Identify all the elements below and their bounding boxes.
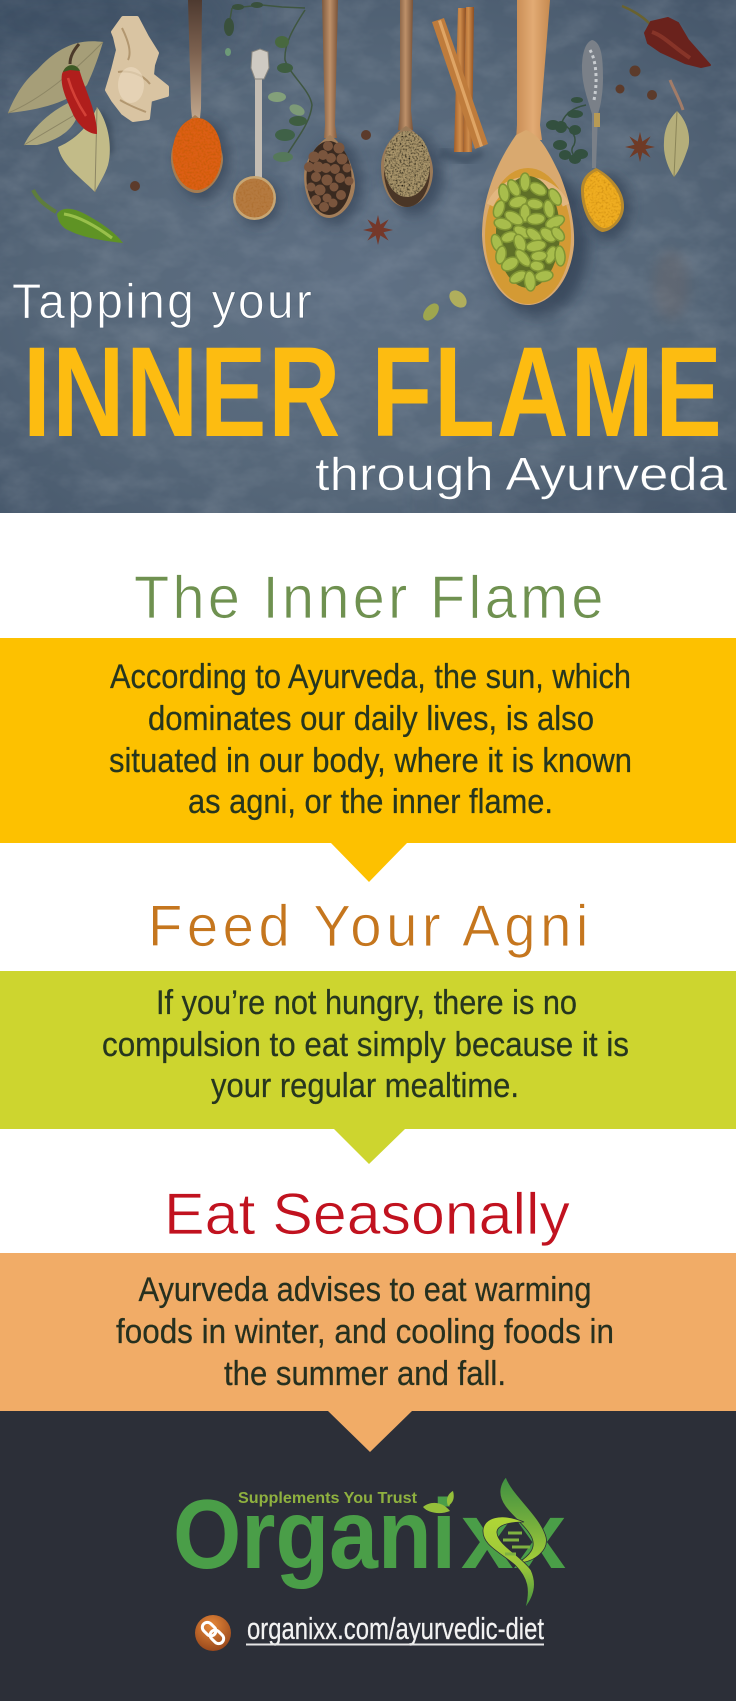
icon: link chain	[195, 1615, 231, 1651]
text: feed your agni body: If you’re not hungry, there is no	[156, 984, 577, 1022]
heading: The Inner Flame: The Inner Flame	[134, 565, 603, 631]
logo tagline: Supplements You Trust	[238, 1490, 417, 1507]
text: eat seasonally body: foods in winter, and cooling foods in	[116, 1313, 614, 1351]
text: feed your agni body: compulsion to eat simply because it is	[102, 1026, 629, 1064]
text: inner flame body: as agni, or the inner flame.	[188, 783, 553, 821]
icon: bay leaves	[8, 41, 114, 192]
icon: green chili	[33, 190, 123, 243]
icon: silver spoon with ground spice	[233, 49, 281, 226]
icon: large wooden spoon with cardamom	[482, 0, 588, 317]
icon: ginger root	[107, 18, 167, 120]
text: inner flame body: situated in our body, where it is known	[109, 742, 632, 780]
icon: peppercorns	[130, 66, 657, 191]
logo: Organixx	[173, 1477, 566, 1608]
text: inner flame body: According to Ayurveda, the sun, which	[110, 658, 631, 696]
panel: orange callout	[0, 1253, 736, 1452]
icon: herb sprig right	[546, 97, 588, 164]
panel: dark footer	[0, 1411, 736, 1701]
icon: spoon with seeds	[381, 0, 442, 215]
icon: dried red chili	[622, 6, 710, 67]
icon: cardamom pods	[423, 290, 467, 321]
text: feed your agni body	[102, 984, 629, 1105]
logo wordmark: Organi	[173, 1479, 456, 1589]
link: organixx.com/ayurvedic-diet: organixx.com/ayurvedic-diet	[247, 1611, 544, 1646]
text: feed your agni body: your regular mealtime.	[211, 1067, 519, 1105]
panel: yellow callout	[0, 638, 736, 882]
panel: white section background	[0, 513, 736, 1413]
text: eat seasonally body	[116, 1271, 614, 1393]
panel: hero photo with spices	[0, 0, 736, 540]
icon: spoon with peppercorns	[304, 0, 362, 226]
slate background	[0, 0, 736, 540]
icon: ornate spoon with turmeric	[581, 40, 631, 240]
title: INNER FLAME: INNER FLAME	[23, 321, 722, 464]
panel: lime callout	[0, 971, 736, 1164]
icon: spoon with orange spice	[171, 0, 230, 200]
subtitle: through Ayurveda: through Ayurveda	[315, 448, 727, 500]
heading: Feed Your Agni: Feed Your Agni	[148, 894, 588, 959]
logo wordmark: xx	[461, 1483, 566, 1589]
text: inner flame body: dominates our daily lives, is also	[148, 700, 594, 738]
text: eat seasonally body: Ayurveda advises to eat warming	[138, 1271, 592, 1309]
text: inner flame body	[109, 658, 632, 821]
heading: Eat Seasonally: Eat Seasonally	[164, 1182, 570, 1247]
title: Tapping your: Tapping your	[12, 275, 312, 329]
icon: single leaf	[664, 80, 689, 177]
icon: cinnamon sticks	[432, 7, 488, 160]
icon: red chili	[62, 44, 97, 134]
text: eat seasonally body: the summer and fall.	[224, 1355, 506, 1393]
logo DNA helix	[483, 1477, 546, 1608]
icon: star anise	[363, 132, 655, 245]
logo leaves	[423, 1491, 454, 1513]
icon: herb sprig	[224, 2, 312, 162]
